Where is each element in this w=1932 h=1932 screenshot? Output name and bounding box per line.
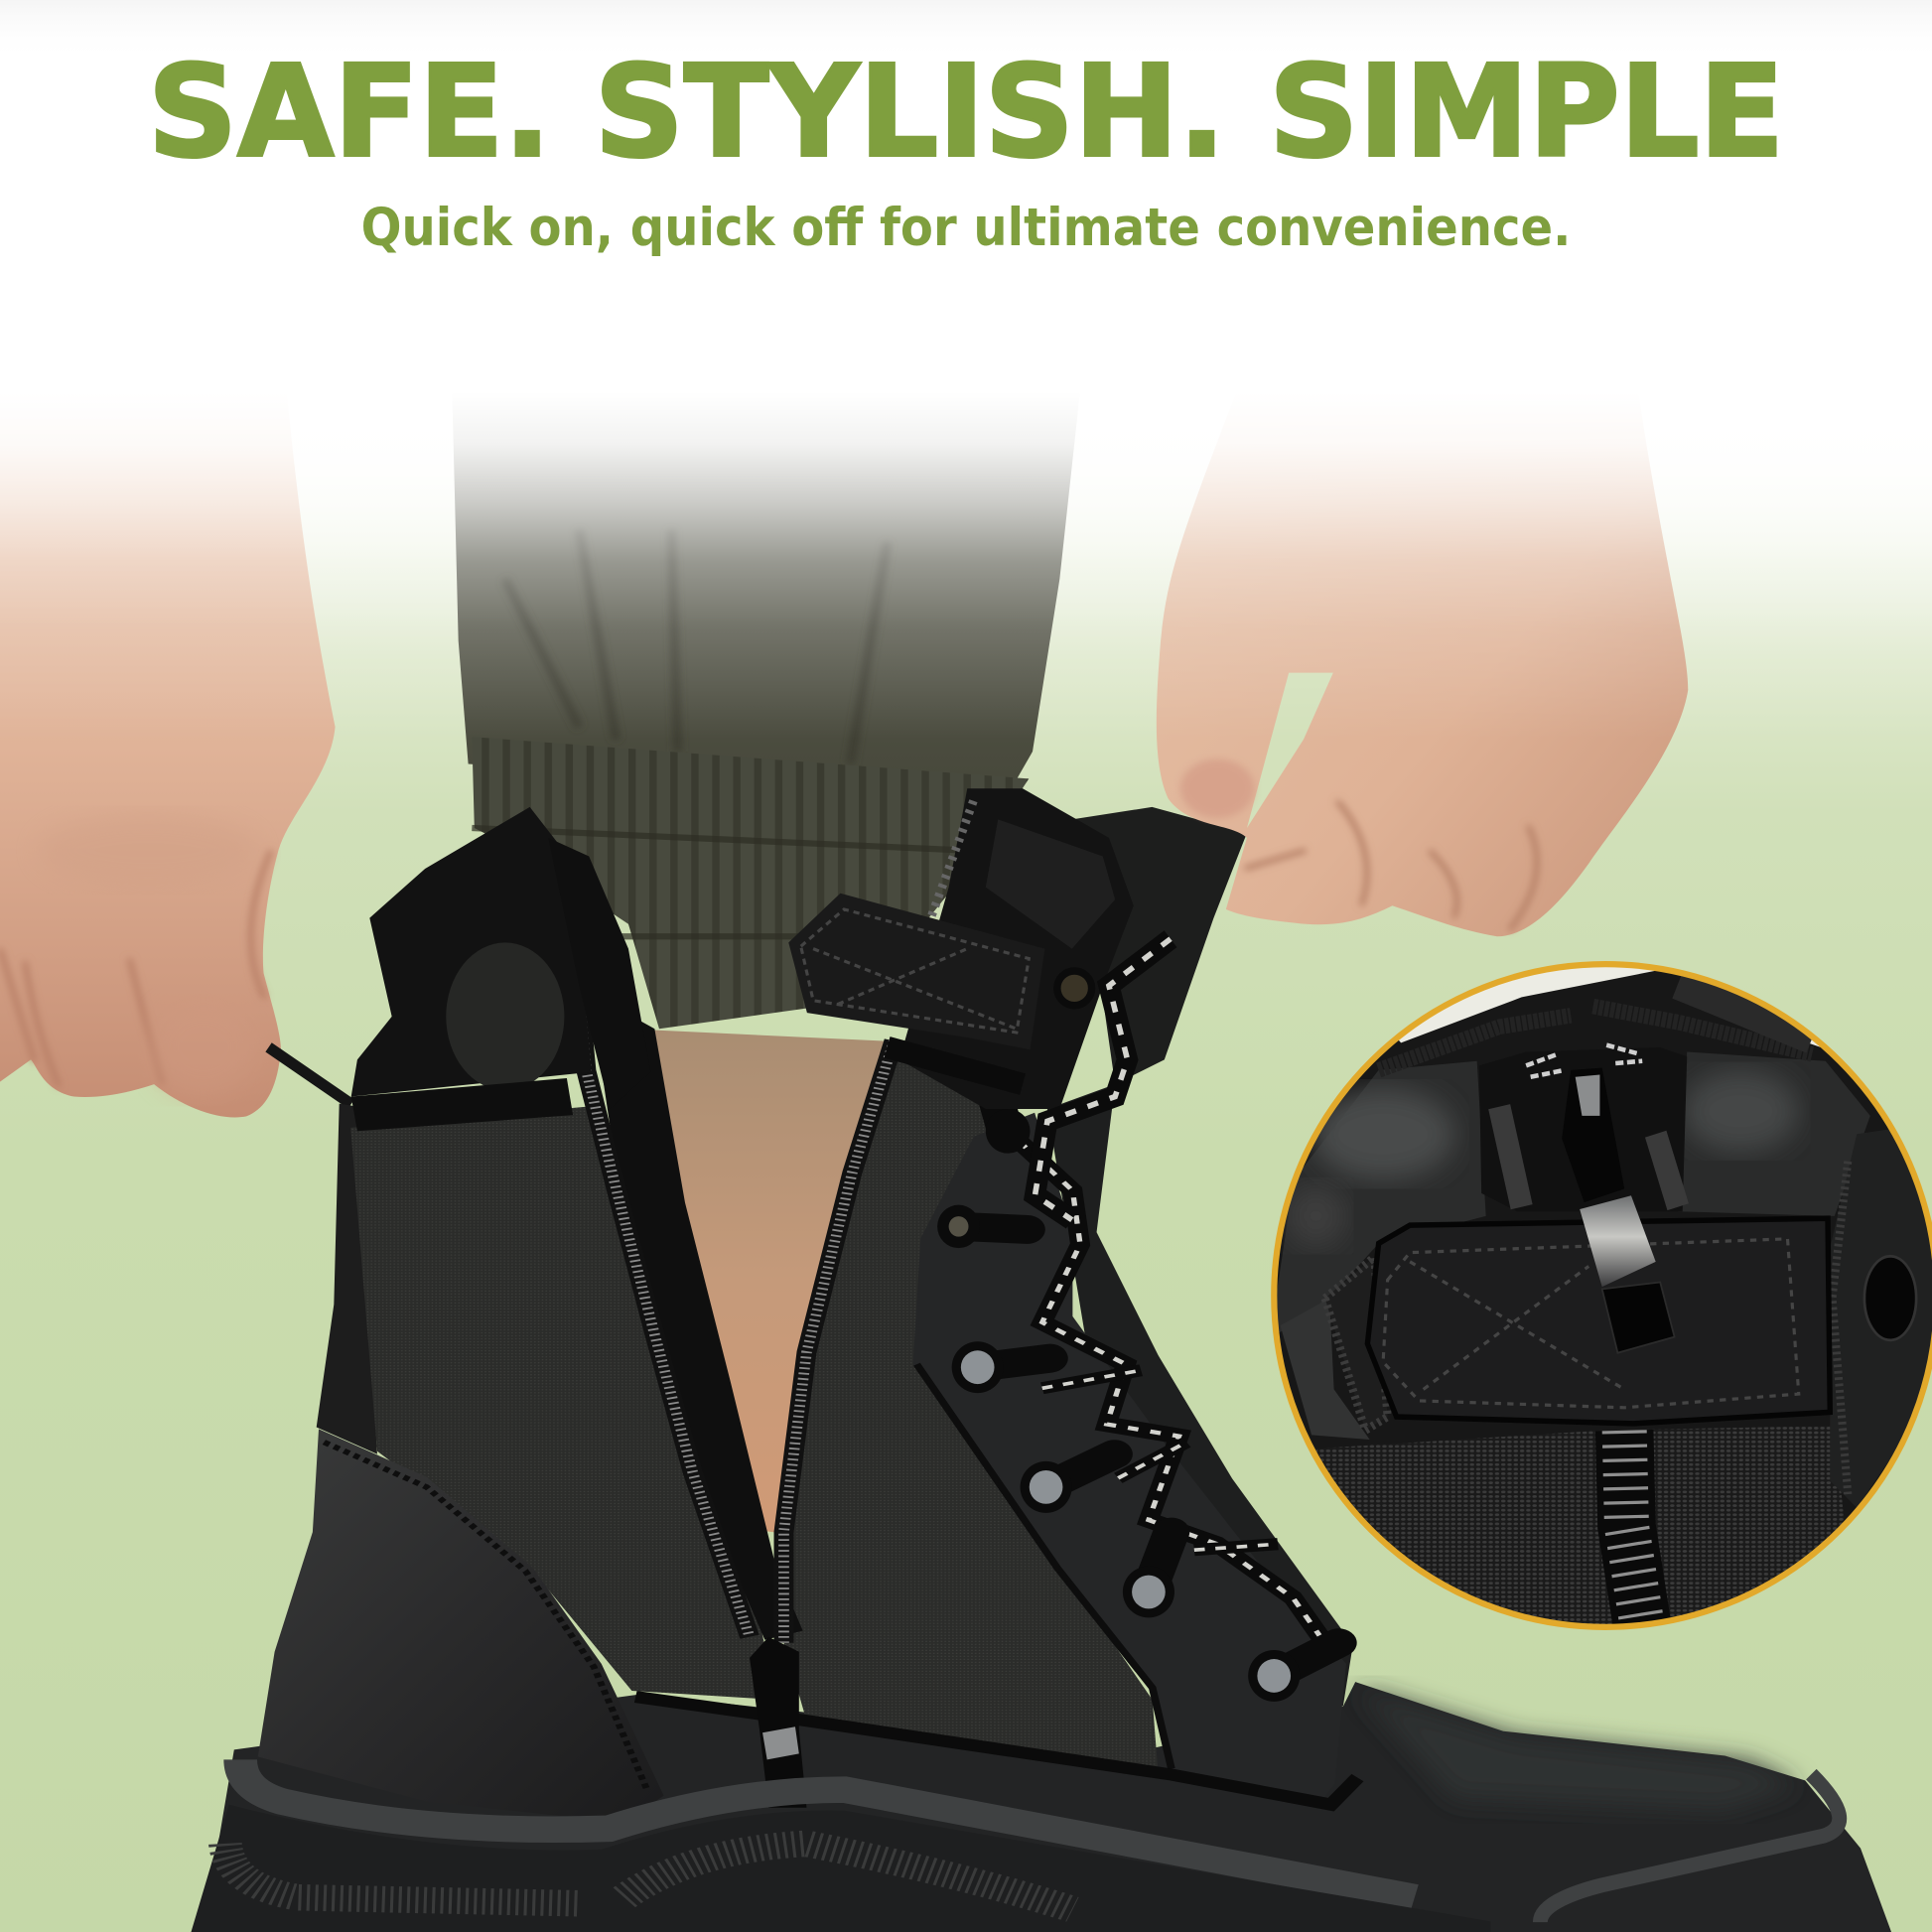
zipper pull xyxy=(1562,1068,1675,1353)
left hand xyxy=(0,296,336,1117)
boot tongue xyxy=(1072,807,1247,1084)
tongue under laces xyxy=(1047,1084,1353,1707)
right zipper teeth xyxy=(783,1040,894,1643)
right side panel xyxy=(1830,1130,1932,1508)
right hand xyxy=(1157,308,1688,936)
subtitle: Quick on, quick off for ultimate convenience. xyxy=(361,199,1571,258)
zoomed boot details xyxy=(191,838,1490,1932)
left collar xyxy=(351,807,592,1131)
lace panel xyxy=(913,1113,1346,1799)
toe cap rim xyxy=(1540,1774,1840,1922)
right collar xyxy=(888,788,1134,1109)
upper lacing xyxy=(986,939,1171,1220)
bare leg xyxy=(628,1029,888,1534)
laces top xyxy=(1379,1007,1812,1070)
pull loop xyxy=(269,1047,351,1104)
midsole rim xyxy=(240,1759,1415,1897)
left mesh panel xyxy=(350,1107,776,1700)
upper zipper flap xyxy=(548,838,650,1109)
top grey tint xyxy=(0,0,1932,62)
thumb nail xyxy=(1180,759,1254,818)
back strip xyxy=(317,1104,377,1454)
midsole xyxy=(191,1805,1490,1932)
lower zipper teeth xyxy=(1624,1431,1642,1626)
black zipper flap xyxy=(590,993,803,1640)
zipper slider xyxy=(750,1637,806,1808)
eyelets and lace keepers xyxy=(937,1101,1338,1702)
mesh bottom xyxy=(1316,1427,1844,1624)
heel counter xyxy=(258,1429,664,1823)
right mesh panel xyxy=(783,1040,1158,1768)
right leather xyxy=(1678,1052,1870,1216)
trousers xyxy=(450,296,1090,1029)
left zipper teeth xyxy=(532,838,750,1637)
gold ring xyxy=(1274,964,1932,1627)
velcro strap xyxy=(1325,1218,1830,1431)
zipper tape xyxy=(1479,1047,1687,1211)
velcro strap xyxy=(788,894,1044,1049)
boot xyxy=(191,788,1891,1932)
tread texture xyxy=(225,1844,1072,1909)
title: SAFE. STYLISH. SIMPLE xyxy=(148,38,1784,186)
white fade over upper image xyxy=(0,0,1932,740)
inset: zip detail circle xyxy=(1272,951,1932,1645)
welt seam xyxy=(635,1697,1357,1805)
trouser elastic cuff xyxy=(472,737,1029,1029)
white background wedge xyxy=(1399,967,1821,1047)
forefoot upper xyxy=(204,1682,1891,1932)
gap between thumb and fingers xyxy=(1247,673,1333,828)
left leather xyxy=(1276,1061,1486,1334)
